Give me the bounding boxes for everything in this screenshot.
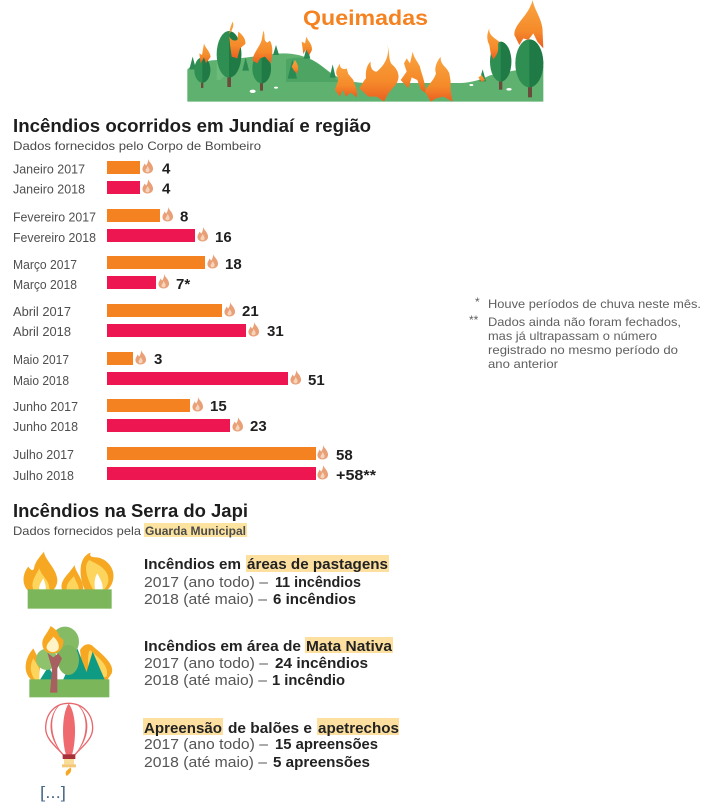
row: Março 2018: 7* — [176, 276, 190, 293]
icon: hot air balloon — [46, 703, 93, 776]
text: balões: 15 apreensões — [275, 736, 378, 753]
subheading: Guarda Municipal: Guarda Municipal — [145, 524, 246, 538]
row: Janeiro 2018: Janeiro 2018 — [13, 182, 85, 196]
row: Julho 2017: Julho 2017 — [13, 447, 74, 462]
row: Fevereiro 2018: 16 — [215, 229, 232, 246]
illustration: burning landscape — [187, 0, 543, 102]
footnotes: registrado no mesmo período do — [488, 343, 678, 357]
text: Mata Nativa: Incêndios em área de — [144, 638, 301, 655]
row: Junho 2018: 23 — [250, 418, 267, 435]
text: Mata Nativa — [144, 637, 393, 689]
text: balões: Apreensão — [144, 720, 222, 737]
text: balões: 2018 (até maio) – — [144, 754, 268, 771]
row: Março 2018: Março 2018 — [13, 277, 77, 292]
row: Fevereiro 2017: 8 — [180, 208, 188, 226]
heading: Serra do Japi: Incêndios na Serra do Japi — [13, 501, 248, 521]
row: Julho 2017: 58 — [336, 447, 353, 464]
text: Mata Nativa: 2017 (ano todo) – — [144, 655, 269, 672]
flames — [199, 0, 543, 102]
text: Mata Nativa: Mata Nativa — [306, 638, 393, 655]
row: Julho 2017 — [13, 445, 353, 464]
bar chart: monthly fires — [13, 159, 376, 484]
row: Abril 2018: 31 — [267, 323, 284, 340]
row: Abril 2017: 21 — [242, 303, 259, 320]
text: pastagens: 2017 (ano todo) – — [144, 574, 269, 591]
row: Maio 2017: Maio 2017 — [13, 352, 69, 367]
small conifers — [189, 45, 486, 81]
footnotes: Dados ainda não foram fechados, — [488, 315, 681, 329]
text: pastagens: 2018 (até maio) – — [144, 591, 268, 608]
text: balões: apetrechos — [318, 720, 399, 737]
footnotes: ** — [469, 313, 479, 327]
text: Mata Nativa: 2018 (até maio) – — [144, 672, 268, 689]
text: pastagens: Incêndios em — [144, 556, 241, 573]
row: Janeiro 2017: 4 — [162, 160, 171, 178]
text: balões: de balões e — [228, 720, 312, 737]
text: balões: 2017 (ano todo) – — [144, 736, 269, 753]
row: Maio 2017 — [13, 350, 162, 368]
text: pastagens: 11 incêndios — [275, 574, 361, 591]
row: Fevereiro 2017: Fevereiro 2017 — [13, 210, 96, 224]
row: Junho 2018: Junho 2018 — [13, 419, 78, 434]
title: Queimadas — [303, 7, 428, 30]
footnotes — [469, 295, 701, 371]
subheading: Guarda Municipal — [13, 523, 247, 538]
text: balões — [143, 718, 399, 771]
icon: forest fire — [26, 626, 112, 697]
row: Fevereiro 2018 — [13, 227, 232, 246]
row: Janeiro 2017 — [13, 159, 171, 178]
row: Janeiro 2017: Janeiro 2017 — [13, 162, 85, 176]
row: Junho 2017: Junho 2017 — [13, 399, 78, 414]
ellipsis: [...] — [40, 783, 66, 802]
row: Junho 2017 — [13, 397, 227, 415]
text: balões: 5 apreensões — [273, 754, 370, 771]
row: Março 2017: 18 — [225, 256, 242, 273]
text: pastagens — [144, 555, 389, 608]
subheading: Guarda Municipal: Dados fornecidos pela — [13, 524, 141, 538]
row: Abril 2018 — [13, 322, 284, 340]
row: Janeiro 2018 — [13, 179, 171, 198]
footnotes: mas já ultrapassam o número — [488, 329, 657, 343]
subheading: source: Dados fornecidos pelo Corpo de Bombeiro — [13, 139, 261, 153]
footnotes: Houve períodos de chuva neste mês. — [488, 297, 701, 311]
row: Março 2018 — [13, 274, 190, 293]
heading: Jundiaí: Incêndios ocorridos em Jundiaí e região — [13, 116, 371, 136]
row: Maio 2018 — [13, 370, 325, 389]
row: Fevereiro 2017 — [13, 207, 188, 226]
row: Julho 2018: +58** — [336, 467, 376, 484]
footnotes: ano anterior — [488, 357, 558, 371]
row: Abril 2017 — [13, 302, 259, 320]
icon: grass fire — [24, 552, 114, 609]
row: Março 2017: Março 2017 — [13, 257, 77, 272]
row: Janeiro 2018: 4 — [162, 180, 171, 198]
text: Mata Nativa: 1 incêndio — [272, 672, 345, 689]
row: Fevereiro 2018: Fevereiro 2018 — [13, 230, 96, 245]
row: Julho 2018: Julho 2018 — [13, 468, 74, 483]
row: Junho 2017: 15 — [210, 398, 227, 415]
text: pastagens: 6 incêndios — [273, 591, 356, 608]
row: Maio 2018: Maio 2018 — [13, 373, 69, 388]
text: pastagens: áreas de pastagens — [247, 556, 388, 573]
row: Maio 2017: 3 — [154, 351, 162, 368]
row: Março 2017 — [13, 254, 242, 273]
row: Junho 2018 — [13, 417, 267, 435]
text: Mata Nativa: 24 incêndios — [275, 655, 368, 672]
footnotes: * — [475, 295, 480, 309]
trees — [194, 31, 543, 97]
row: Maio 2018: 51 — [308, 372, 325, 389]
row: Abril 2018: Abril 2018 — [13, 324, 71, 339]
row: Julho 2018 — [13, 465, 376, 484]
row: Abril 2017: Abril 2017 — [13, 304, 71, 319]
